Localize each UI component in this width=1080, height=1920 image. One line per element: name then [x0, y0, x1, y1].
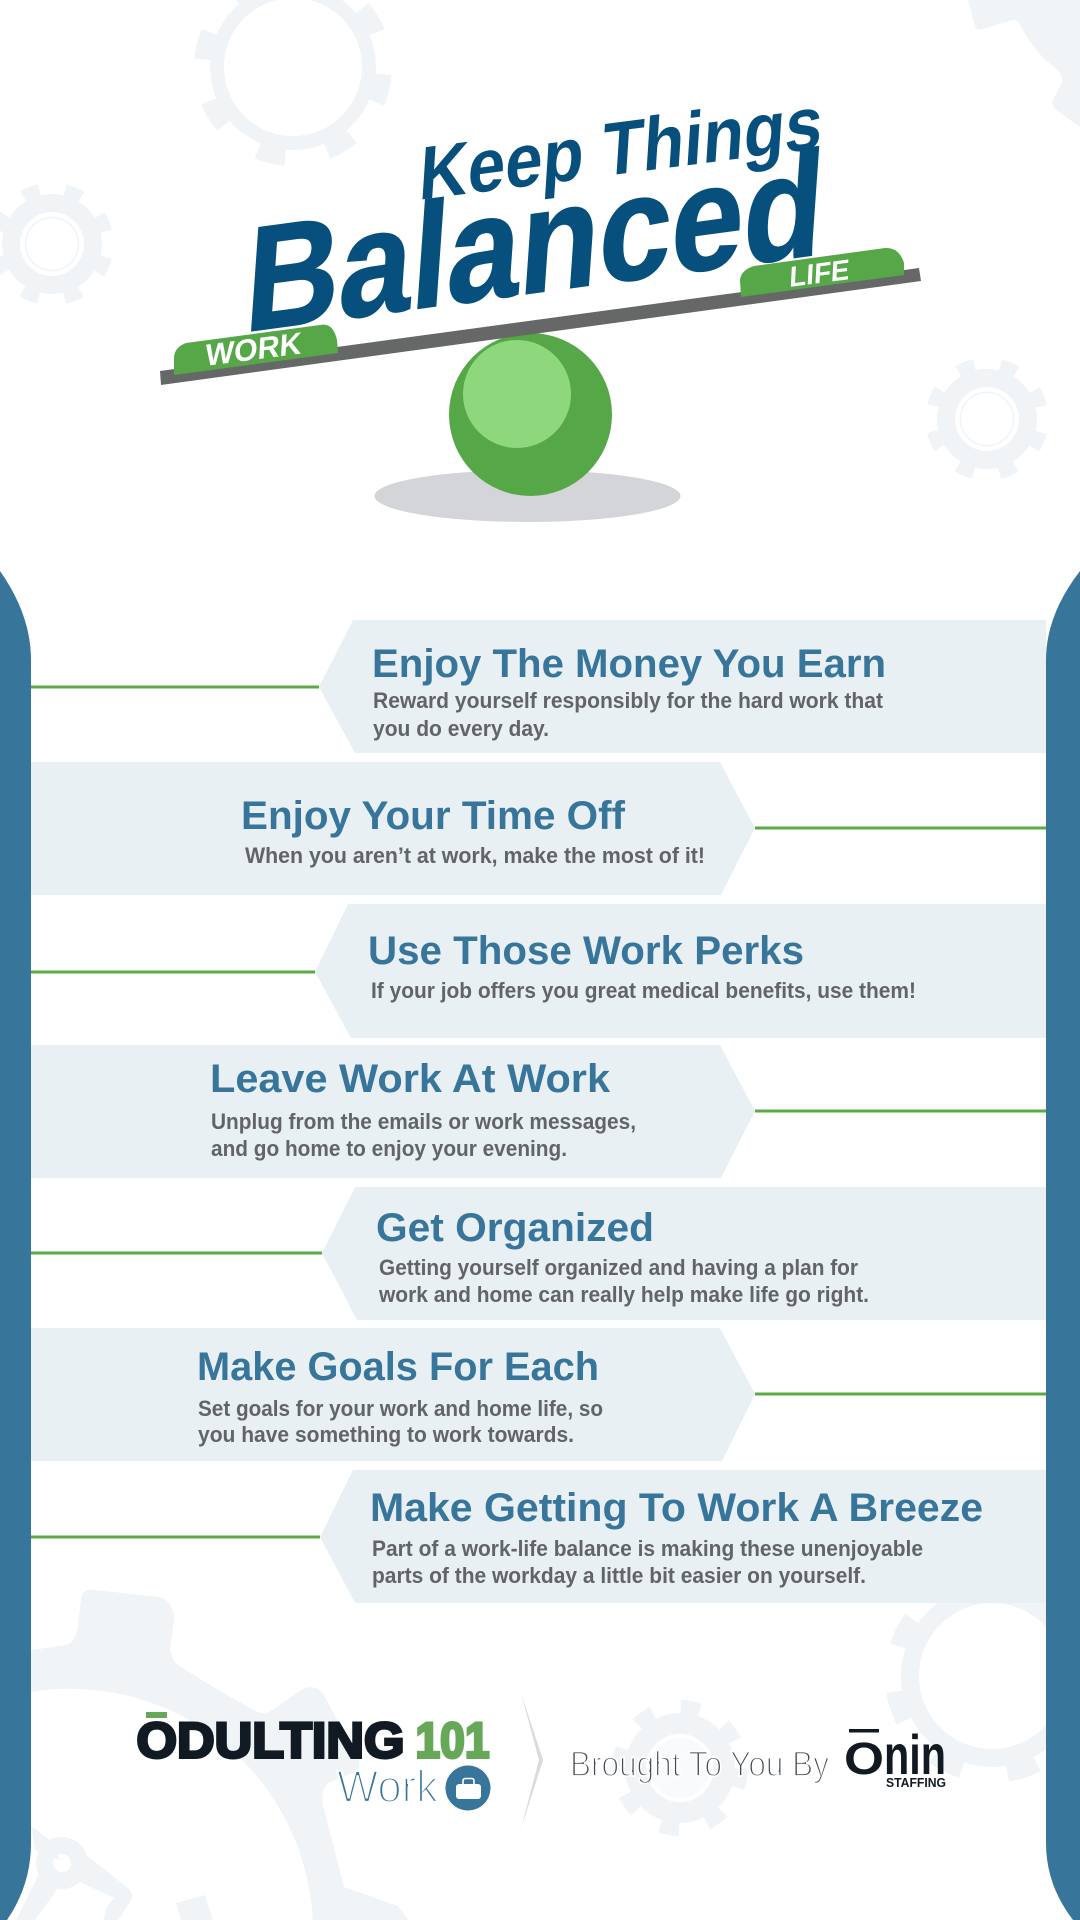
- body: Unplug from the emails or work messages,: [211, 1109, 636, 1134]
- body: Getting yourself organized and having a plan for: [379, 1255, 858, 1280]
- heading: Leave Work At Work: [210, 1057, 611, 1101]
- macron bar: [849, 1729, 879, 1732]
- label: WORK: WORK: [205, 326, 303, 373]
- body: Set goals for your work and home life, so: [198, 1396, 603, 1421]
- wordmark: nin: nin: [884, 1723, 946, 1786]
- heading: Enjoy The Money You Earn: [372, 642, 886, 686]
- chevron divider: [521, 1693, 543, 1829]
- label: LIFE: LIFE: [789, 254, 850, 294]
- heading: Enjoy Your Time Off: [241, 794, 626, 838]
- heading: Make Goals For Each: [197, 1345, 599, 1389]
- title: Balanced: Balanced: [241, 118, 830, 364]
- body: When you aren’t at work, make the most of it!: [245, 843, 705, 868]
- gear: top centre: [195, 0, 391, 165]
- heading: Get Organized: [376, 1206, 654, 1250]
- wordmark: 101: 101: [416, 1712, 490, 1768]
- logo: Odulting 101 Work: [136, 1712, 490, 1812]
- gear: bottom right: [870, 1554, 1080, 1798]
- body: Reward yourself responsibly for the hard work that: [373, 688, 884, 713]
- text: Brought To You By: Brought To You By: [570, 1745, 829, 1784]
- card 3: work perks: [31, 904, 1046, 1038]
- body: you do every day.: [373, 716, 549, 741]
- body: parts of the workday a little bit easier on yourself.: [372, 1563, 866, 1588]
- gear: bottom left small: [16, 1826, 213, 1920]
- card 2: time off: [31, 762, 1046, 895]
- body: [211, 1109, 636, 1161]
- card 7: getting to work: [31, 1470, 1046, 1603]
- logo: Onin Staffing: [844, 1723, 946, 1790]
- body: If your job offers you great medical benefits, use them!: [371, 978, 916, 1003]
- body: work and home can really help make life go right.: [378, 1282, 869, 1307]
- tab: work: [174, 325, 338, 375]
- card 1: enjoy the money: [31, 620, 1046, 753]
- seesaw beam: [160, 268, 921, 385]
- body: [372, 1536, 923, 1588]
- card 6: make goals: [31, 1328, 1046, 1461]
- title: Keep Things: Keep Things: [417, 80, 825, 217]
- right side bar: [1046, 571, 1080, 1920]
- body: and go home to enjoy your evening.: [211, 1136, 567, 1161]
- body: you have something to work towards.: [198, 1422, 574, 1447]
- seesaw ball: [449, 333, 612, 496]
- icon: briefcase: [446, 1766, 490, 1810]
- body: [198, 1396, 603, 1447]
- left side bar: [0, 571, 31, 1920]
- macron bar: [146, 1712, 167, 1718]
- gear: bottom centre: [618, 1706, 742, 1830]
- tab: life: [740, 248, 904, 297]
- body: [378, 1255, 869, 1307]
- heading: Make Getting To Work A Breeze: [370, 1486, 983, 1530]
- card 4: leave work at work: [31, 1045, 1046, 1178]
- shadow under ball: [374, 470, 680, 522]
- heading: Use Those Work Perks: [368, 929, 804, 973]
- gear: left: [0, 177, 119, 311]
- card 5: get organized: [31, 1187, 1046, 1320]
- gear: bottom left large hole: [0, 1689, 313, 1920]
- body: Part of a work-life balance is making these unenjoyable: [372, 1536, 923, 1561]
- wordmark: Work: Work: [337, 1761, 438, 1812]
- body: [373, 688, 884, 741]
- gear: right: [920, 352, 1054, 486]
- gear: bottom left large: [31, 1590, 408, 1920]
- wordmark: ODULTING: ODULTING: [136, 1712, 404, 1768]
- wordmark: STAFFING: STAFFING: [886, 1775, 946, 1790]
- gear: top right corner: [968, 0, 1080, 127]
- wordmark: O: O: [844, 1733, 884, 1784]
